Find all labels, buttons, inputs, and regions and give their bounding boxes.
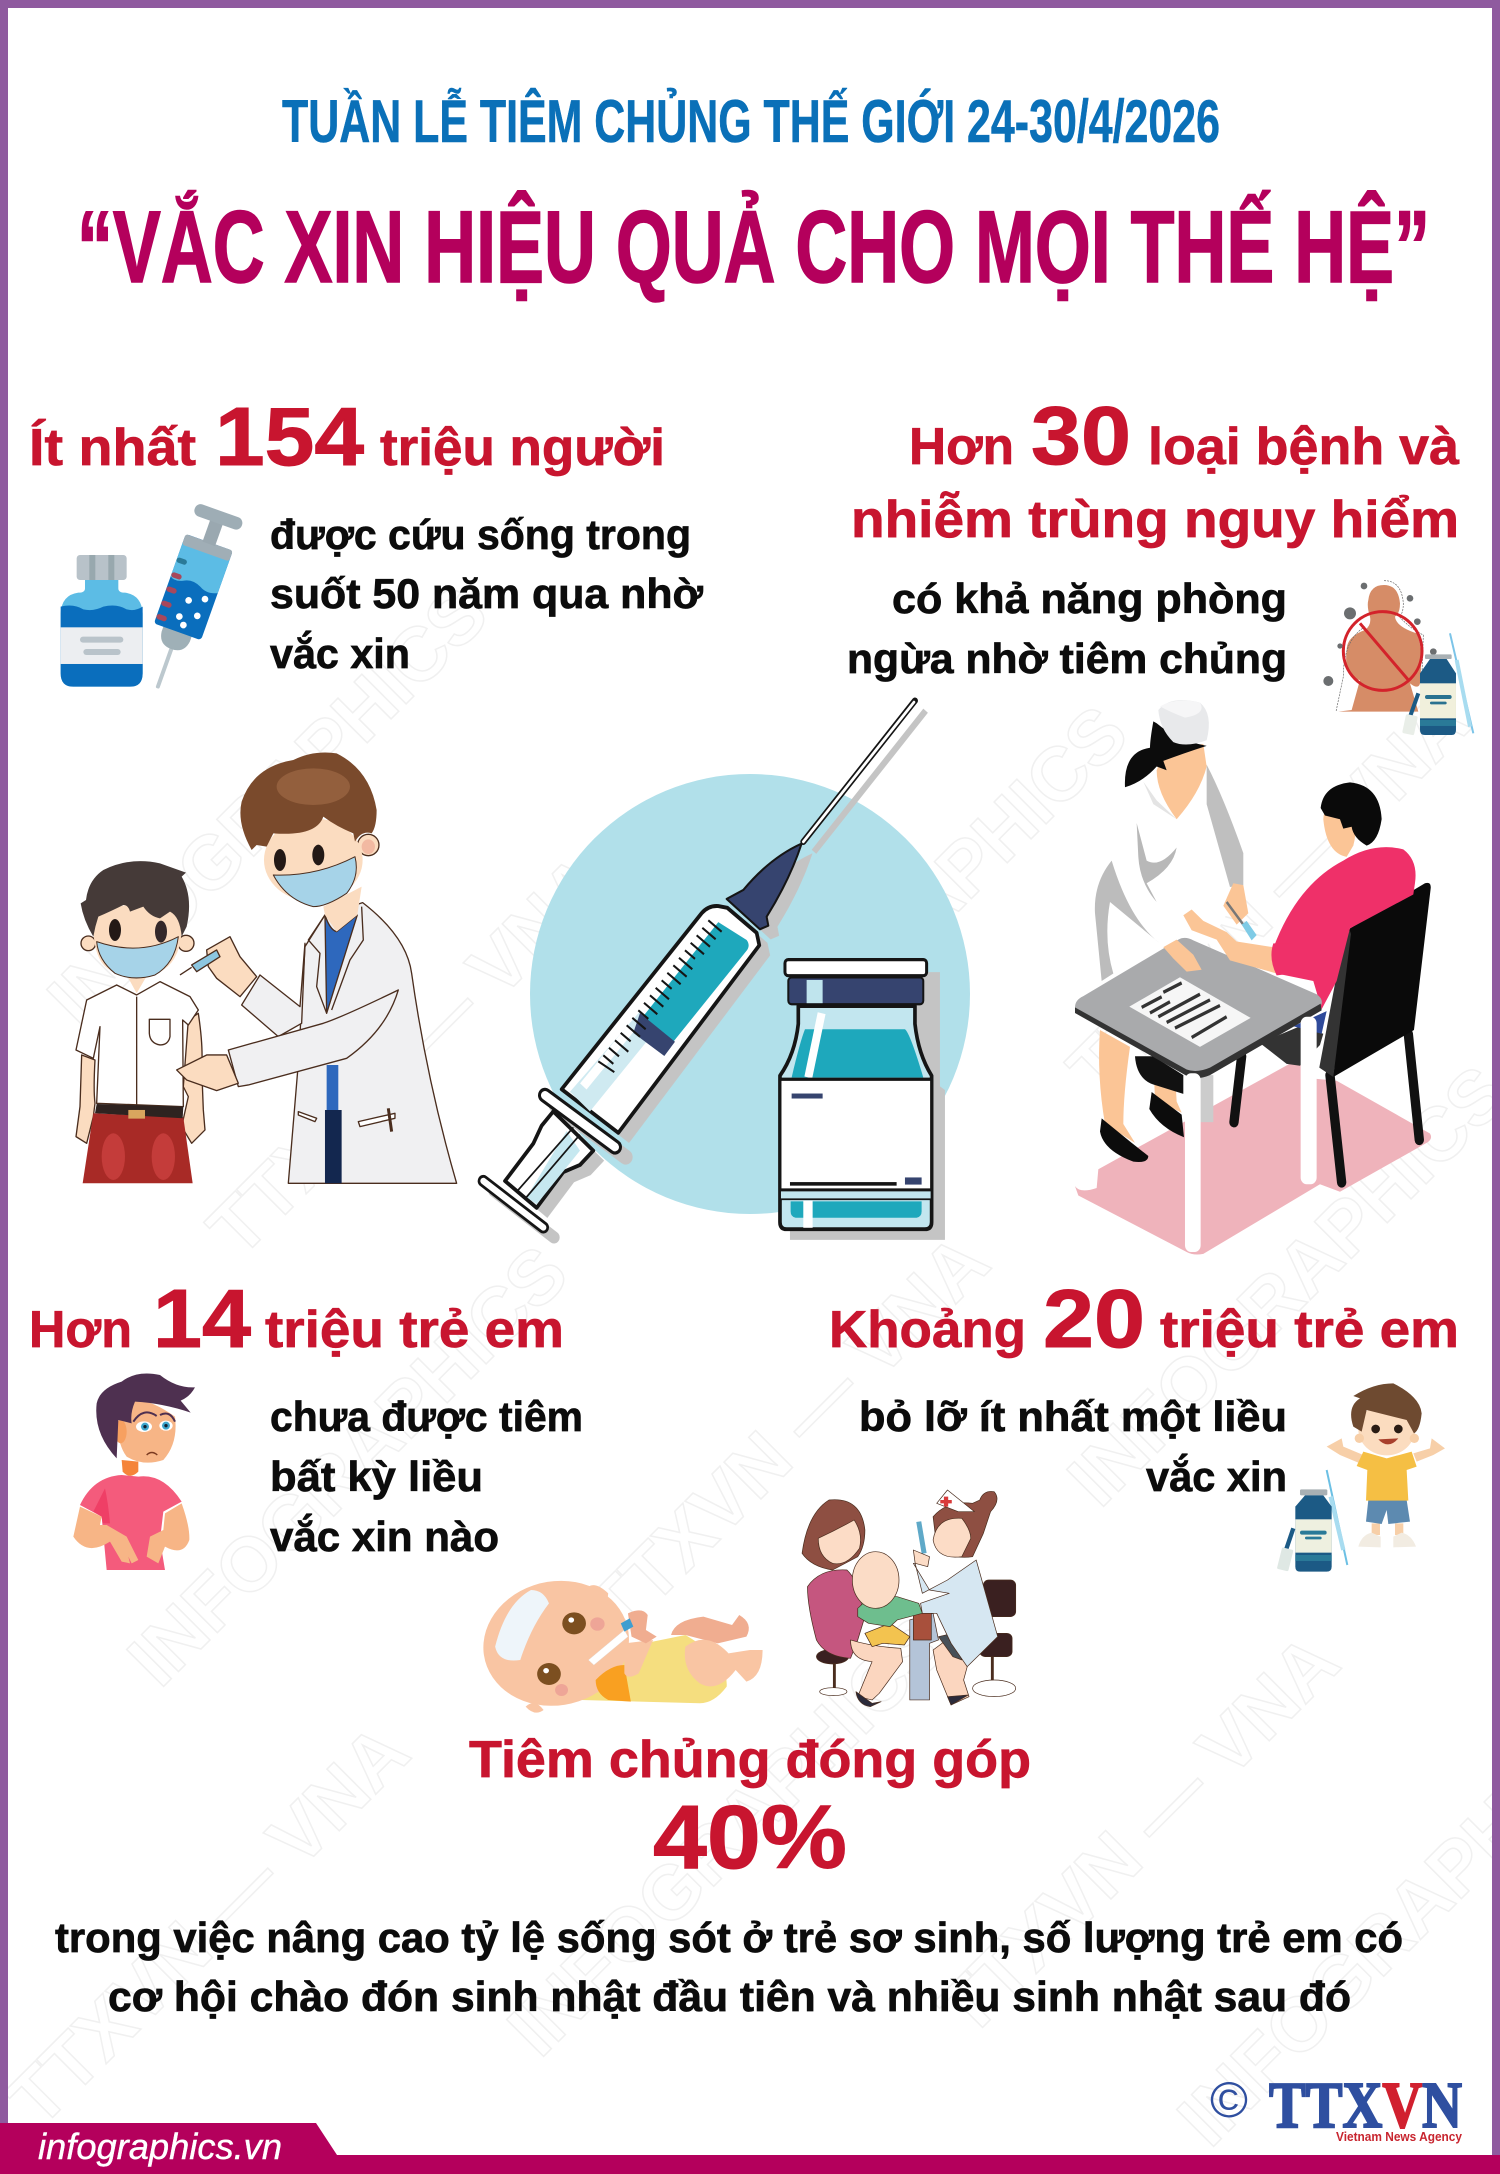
watermarks: TTXVN — VNA — [192, 839, 625, 1272]
syringe barrel — [562, 906, 759, 1133]
syringe flange — [545, 1095, 615, 1147]
watermarks — [0, 570, 1500, 2162]
pink floor — [1075, 1056, 1431, 1254]
boy hair — [81, 861, 189, 937]
tick marks — [598, 920, 722, 1072]
boy shirt — [1357, 1452, 1417, 1501]
watermarks: INFOGRAPHICS — [112, 1230, 584, 1702]
icon: vial and syringe — [61, 503, 244, 697]
nurse hair — [1125, 721, 1207, 787]
doctor lower arm — [228, 990, 398, 1087]
illustration: sick baby — [464, 1562, 763, 1725]
heading: about 20 million children: Khoảng — [829, 1301, 1026, 1359]
nurse coat — [1098, 765, 1243, 977]
heading: over 30 diseases: 30 — [1031, 389, 1131, 482]
baby body — [581, 1635, 727, 1703]
text: saved over 50 years: suốt 50 năm qua nhờ — [270, 570, 703, 617]
doctor shirt — [325, 915, 357, 1013]
cheeks — [590, 1617, 605, 1631]
doctor ear — [358, 834, 379, 856]
watermarks: TTXVN — VNA — [572, 1219, 1005, 1652]
doctor mask — [273, 857, 356, 907]
icon: happy boy with vial — [1277, 1383, 1445, 1572]
boy arms — [182, 1013, 205, 1143]
heading: about 20 million children: triệu trẻ em — [1160, 1301, 1459, 1359]
text: saved over 50 years: vắc xin — [270, 629, 410, 677]
vial body — [780, 1006, 932, 1229]
text: unvaccinated children: chưa được tiêm — [270, 1393, 583, 1440]
heading: over 30 diseases: nhiễm trùng nguy hiểm — [851, 491, 1459, 549]
table top — [1075, 938, 1322, 1075]
vial — [1300, 1489, 1327, 1495]
coat shading — [1095, 861, 1160, 981]
boy mask — [97, 937, 178, 978]
text: infant survival contribution — [55, 1914, 1403, 2020]
chair side — [1319, 930, 1351, 1077]
blue circle — [530, 774, 970, 1214]
text: preventable through vaccination: có khả năng phòng — [892, 575, 1287, 622]
text: preventable through vaccination: ngừa nhờ tiêm chủng — [847, 635, 1287, 682]
heading: 154 million people: Ít nhất — [29, 419, 196, 477]
nurse legs — [933, 1637, 969, 1705]
heading: over 14 million children: triệu trẻ em — [265, 1301, 564, 1359]
syringe needle — [803, 701, 915, 842]
mother legs — [851, 1640, 903, 1700]
vial cap — [785, 960, 927, 976]
heading: about 20 million children: 20 — [1043, 1272, 1145, 1365]
logo: TTXVN copyright: © — [1210, 2072, 1248, 2128]
boy ears — [81, 936, 96, 951]
nurse hand — [913, 1550, 930, 1567]
heading: 154 million people — [29, 390, 665, 483]
doctor hair — [240, 752, 377, 850]
baby ears — [588, 1585, 608, 1608]
lower arm — [624, 1640, 653, 1677]
boy face — [93, 902, 182, 978]
nurse cap — [937, 1490, 974, 1512]
ampoule — [1286, 1528, 1293, 1550]
syringe — [919, 1522, 924, 1553]
watermarks: INFOGRAPHICS — [672, 690, 1144, 1162]
nurse shoe — [947, 1695, 968, 1705]
illustration: doctor vaccinating a boy — [76, 752, 457, 1183]
text: missed at least one dose: bỏ lỡ ít nhất một liều — [859, 1393, 1287, 1440]
text: infant survival contribution: trong việc nâng cao tỷ lệ sống sót ở trẻ sơ sinh, số lượng trẻ em có — [55, 1914, 1403, 1961]
text: saved over 50 years — [270, 511, 703, 677]
small syringe — [1227, 902, 1243, 925]
watermarks: TTXVN — VNA — [1052, 679, 1485, 1112]
mother hair — [802, 1500, 865, 1570]
syringe liquid — [640, 922, 749, 1042]
watermarks: INFOGRAPHICS — [32, 570, 504, 1042]
icon: sad boy — [73, 1373, 195, 1570]
vial label — [780, 1079, 932, 1190]
nurse coat — [913, 1560, 998, 1667]
boy neck — [127, 975, 147, 993]
watermarks: INFOGRAPHICS — [492, 1600, 964, 2072]
forehead patch — [495, 1590, 549, 1661]
thermometer — [588, 1630, 628, 1665]
doctor lapels — [308, 907, 363, 1013]
mother top — [807, 1570, 865, 1658]
nurse face — [933, 1518, 971, 1557]
boy eyes — [109, 919, 121, 941]
doctor eyes — [274, 849, 286, 871]
baby head — [852, 1552, 899, 1608]
heading: over 14 million children: Hơn — [29, 1301, 132, 1359]
nurse legs — [1099, 1030, 1135, 1143]
baby shorts — [865, 1623, 910, 1647]
syringe handle — [483, 1181, 543, 1227]
nurse hands — [1223, 883, 1248, 925]
watermarks: TTXVN — VNA — [922, 1619, 1355, 2052]
heading: 154 million people: triệu người — [380, 419, 665, 477]
heading: over 14 million children: 14 — [153, 1272, 251, 1365]
boy face — [1358, 1403, 1415, 1455]
boy shirt — [76, 982, 198, 1107]
left stool — [816, 1649, 849, 1664]
icon: body with prohibition sign and vial — [1323, 581, 1473, 735]
patient hair — [1321, 782, 1382, 846]
mother shoe — [856, 1692, 881, 1707]
baby shirt — [858, 1595, 922, 1627]
patient arm — [1183, 910, 1277, 974]
boy legs and shoes — [1372, 1523, 1403, 1535]
doctor raised arm — [242, 943, 305, 1037]
doctor face — [264, 818, 363, 902]
nurse hair — [933, 1491, 997, 1557]
text: unvaccinated children: vắc xin nào — [270, 1512, 499, 1560]
right stool — [983, 1580, 1016, 1617]
syringe hub — [727, 844, 802, 929]
table — [910, 1613, 938, 1700]
patient head — [1323, 804, 1355, 857]
doctor coat — [288, 903, 457, 1183]
front leg — [685, 1640, 763, 1686]
syringe shadow — [494, 711, 926, 1237]
heading: about 20 million children — [829, 1272, 1459, 1365]
boy belt — [95, 1104, 183, 1118]
nurse shoes — [1135, 1056, 1183, 1094]
mother face — [818, 1520, 861, 1564]
small syringe — [180, 967, 192, 975]
footer website: infographics.vn — [38, 2126, 282, 2167]
doctor neck — [323, 887, 362, 932]
patient legs — [1260, 1026, 1323, 1066]
text: infant survival contribution: cơ hội chào đón sinh nhật đầu tiên và nhiều sinh nhật sau đó — [108, 1973, 1351, 2020]
text: unvaccinated children — [270, 1393, 583, 1560]
paper — [1129, 977, 1251, 1047]
baby head — [464, 1562, 648, 1725]
nurse skirt — [938, 1633, 962, 1660]
baby hand — [628, 1610, 657, 1643]
illustration: syringe and vial on blue circle — [483, 701, 970, 1240]
patient shirt — [1272, 847, 1416, 1009]
watermarks: TTXVN — VNA — [0, 1709, 425, 2142]
logo: TTXVN copyright: Vietnam News Agency — [1336, 2129, 1463, 2144]
heading: 154 million people: 154 — [215, 390, 364, 483]
back table leg — [1200, 1075, 1213, 1122]
number: 40 percent: 40% — [653, 1788, 847, 1888]
boy shorts — [1366, 1500, 1410, 1524]
illustration: nurse and patient at table — [1075, 700, 1431, 1254]
illustration: mother, baby and nurse — [802, 1490, 1016, 1707]
heading: over 14 million children — [29, 1272, 564, 1365]
boy pants — [83, 1113, 193, 1183]
back leg — [671, 1615, 749, 1643]
bib — [596, 1665, 631, 1702]
logo: TTXVN copyright: TTXVN — [1269, 2069, 1462, 2142]
heading: over 30 diseases — [851, 389, 1460, 549]
text: missed at least one dose: vắc xin — [1146, 1452, 1287, 1500]
table edge — [1075, 1004, 1322, 1078]
nurse face — [1157, 744, 1207, 819]
baby eyes — [562, 1612, 586, 1634]
boy hair — [1351, 1383, 1422, 1433]
text: preventable through vaccination — [847, 575, 1287, 682]
heading: immunization contributes: Tiêm chủng đóng góp — [469, 1731, 1031, 1789]
footer bar — [0, 2123, 1500, 2174]
text: missed at least one dose — [859, 1393, 1287, 1500]
doctor hands — [207, 937, 257, 997]
vial collar — [788, 977, 923, 1004]
heading: over 30 diseases: loại bệnh và — [1148, 418, 1460, 476]
syringe — [1327, 1470, 1347, 1565]
chair back — [1333, 883, 1431, 1077]
table legs — [1185, 1073, 1201, 1252]
text: saved over 50 years: được cứu sống trong — [270, 511, 691, 558]
pockets and pen — [298, 1112, 395, 1127]
heading: over 30 diseases: Hơn — [909, 418, 1014, 476]
boy arms — [1327, 1438, 1363, 1463]
chair legs — [1234, 1034, 1419, 1182]
text: unvaccinated children: bất kỳ liều — [270, 1453, 483, 1500]
nurse hat — [1158, 700, 1209, 745]
plunger rod — [505, 1111, 593, 1208]
vial shadow — [790, 972, 945, 1240]
